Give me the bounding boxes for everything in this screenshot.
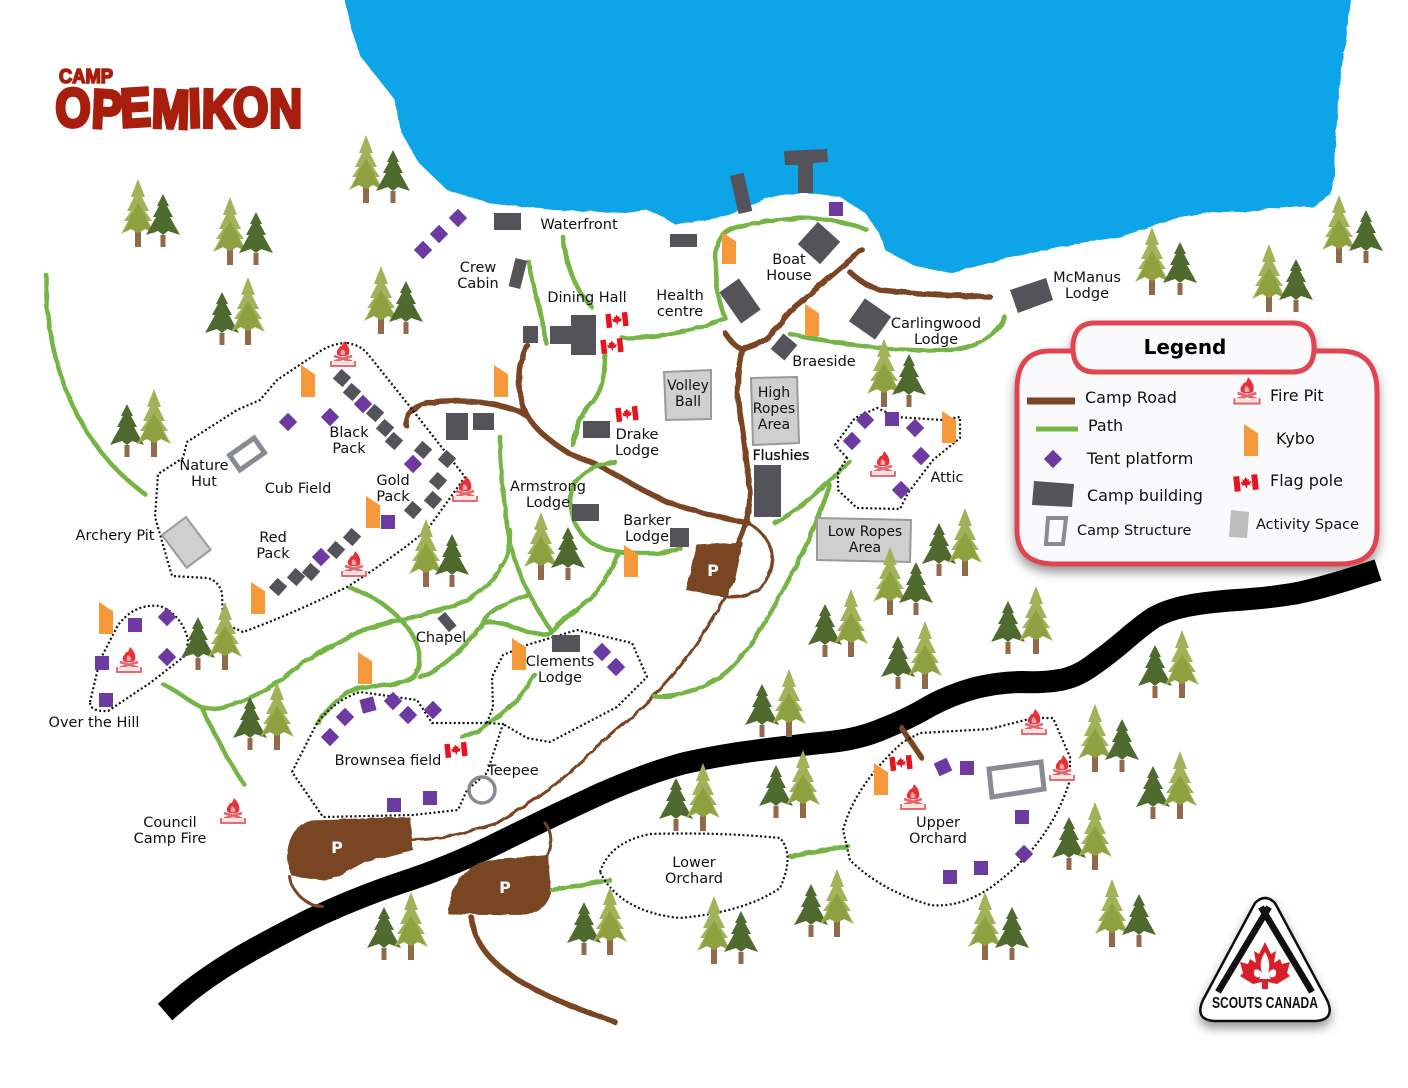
place labels: Braeside: [792, 354, 856, 370]
upper orchard structure: [989, 762, 1044, 797]
place labels: Volley: [667, 378, 709, 394]
camp structures: [230, 438, 1044, 803]
braeside: [771, 334, 797, 360]
place labels: Carlingwood: [891, 316, 981, 332]
place labels: Orchard: [909, 831, 967, 847]
place labels: Lower: [672, 855, 716, 871]
place labels: Red: [259, 530, 287, 546]
place labels: Lodge: [1065, 286, 1109, 302]
dock: [730, 173, 752, 214]
legend: camp building: [1032, 481, 1203, 507]
legend: camp road: Camp Road: [1085, 388, 1177, 407]
dotted area boundaries: [90, 343, 1070, 918]
boundary: brownsea: [292, 692, 503, 817]
legend: camp building: Camp building: [1087, 486, 1203, 505]
panel: legend: [1017, 323, 1377, 564]
health centre: [670, 234, 697, 247]
place labels: Drake: [616, 427, 658, 443]
lake: [344, 0, 1352, 273]
place labels: Gold: [376, 473, 410, 489]
boundary: attic: [835, 408, 960, 509]
place labels: Area: [758, 417, 790, 433]
mcmanus lodge: [1010, 278, 1053, 313]
logo fleur-de-lis: [1254, 952, 1276, 979]
place labels: centre: [657, 304, 703, 320]
place labels: Brownsea field: [335, 753, 441, 769]
place labels: Cabin: [457, 276, 499, 292]
parking lot west: [287, 817, 413, 880]
place labels: Clements: [526, 654, 594, 670]
place labels: Dining Hall: [547, 290, 627, 306]
place labels: Lodge: [625, 529, 669, 545]
boundary: lower orchard: [600, 834, 788, 918]
place labels: Armstrong: [510, 479, 586, 495]
title: OPEMIKON: [54, 77, 302, 141]
place labels: Camp Fire: [134, 831, 206, 847]
legend: kybo: [1244, 424, 1315, 456]
place labels: Attic: [930, 470, 964, 486]
place labels: Black: [329, 425, 369, 441]
place labels: McManus: [1053, 270, 1121, 286]
parking labels: [331, 561, 719, 897]
legend: camp structure: [1046, 518, 1191, 544]
armstrong lodge: [572, 504, 599, 521]
legend: activity space: Activity Space: [1256, 517, 1359, 533]
place labels: Nature: [179, 458, 229, 474]
place labels: Cub Field: [265, 481, 331, 497]
crew cabin: [509, 258, 527, 289]
parking lots: [287, 542, 743, 915]
highway: [165, 570, 1378, 1012]
place labels: House: [766, 268, 812, 284]
place labels: Over the Hill: [49, 715, 139, 731]
drake lodge: [583, 421, 610, 438]
flushies: [754, 465, 781, 517]
west lodge a: [446, 413, 468, 440]
legend: fire pit: Fire Pit: [1270, 386, 1324, 405]
place labels: Crew: [460, 260, 496, 276]
place labels: [49, 217, 1121, 887]
place labels: Lodge: [526, 495, 570, 511]
waterfront building: [494, 213, 521, 230]
dining hall annex: [523, 326, 538, 343]
legend tab: [1073, 323, 1314, 372]
place labels: Council: [143, 815, 197, 831]
teepee: [469, 777, 495, 803]
boat storage: [719, 279, 761, 323]
parking labels: P: [499, 878, 511, 897]
legend: flag pole: Flag pole: [1270, 471, 1343, 490]
parking lot south: [448, 855, 551, 915]
high ropes area: [751, 377, 799, 445]
nature hut structure: [230, 438, 264, 470]
place labels: Teepee: [486, 763, 539, 779]
place labels: Archery Pit: [76, 528, 155, 544]
place labels: Barker: [623, 513, 671, 529]
boundary: cub field: [155, 343, 465, 632]
boundary: upper orchard: [843, 718, 1070, 905]
legend: fire pit: [1234, 377, 1324, 405]
clements lodge: [552, 635, 580, 652]
legend: camp structure: Camp Structure: [1077, 523, 1191, 539]
place labels: Low Ropes: [828, 524, 902, 540]
place labels: Lodge: [538, 670, 582, 686]
place labels: Lodge: [615, 443, 659, 459]
place labels: Pack: [376, 489, 410, 505]
forest trees: [110, 135, 1383, 964]
fire pits: [117, 341, 1074, 823]
volley ball court: [664, 370, 711, 420]
parking labels: P: [331, 838, 343, 857]
boundary: clements: [487, 630, 647, 742]
place labels: Flushies: [753, 448, 809, 464]
archery pit: [162, 517, 211, 568]
boat house: [798, 222, 840, 264]
parking lot centre: [686, 542, 743, 598]
chapel: [437, 612, 457, 632]
place labels: Ball: [675, 394, 701, 410]
legend: path: [1036, 416, 1123, 435]
west lodge b: [473, 413, 494, 430]
place labels: Pack: [256, 546, 290, 562]
kybos: [99, 232, 957, 795]
logo maple leaf: [1240, 942, 1290, 989]
barker lodge: [670, 528, 689, 547]
low ropes area: [817, 518, 911, 562]
Scouts Canada logo: [1200, 898, 1330, 1021]
title: CAMP: [59, 66, 113, 88]
legend: activity space: [1229, 510, 1359, 538]
place labels: Hut: [191, 474, 217, 490]
paths: [46, 218, 1005, 890]
place labels: Area: [849, 540, 881, 556]
boundary: over the hill: [90, 606, 188, 711]
place labels: Boat: [772, 252, 806, 268]
legend heading: Legend: [1144, 335, 1226, 359]
logo poles: [1218, 907, 1312, 992]
place labels: Chapel: [416, 630, 466, 646]
legend: flag pole: [1233, 471, 1343, 492]
place labels: High: [758, 385, 790, 401]
place labels: Ropes: [753, 401, 795, 417]
tent platforms: [95, 202, 1033, 884]
legend: tent platform: Tent platform: [1086, 449, 1193, 468]
dining hall: [550, 315, 596, 355]
camp roads: [290, 250, 990, 1022]
carlingwood lodge: [849, 298, 891, 340]
cabin row tiles: [269, 369, 456, 596]
parking labels: P: [707, 561, 719, 580]
place labels: Lodge: [914, 332, 958, 348]
logo wordmark: SCOUTS CANADA: [1212, 995, 1318, 1012]
place labels: Orchard: [665, 871, 723, 887]
legend: path: Path: [1088, 416, 1123, 435]
camp buildings: [437, 149, 1053, 652]
place labels: Upper: [916, 815, 960, 831]
main dock: [784, 149, 828, 193]
flag poles: [444, 312, 913, 771]
legend: kybo: Kybo: [1276, 429, 1315, 448]
place labels: Pack: [332, 441, 366, 457]
place labels: Waterfront: [540, 217, 618, 233]
place labels: Health: [656, 288, 704, 304]
activity spaces: [162, 370, 911, 568]
